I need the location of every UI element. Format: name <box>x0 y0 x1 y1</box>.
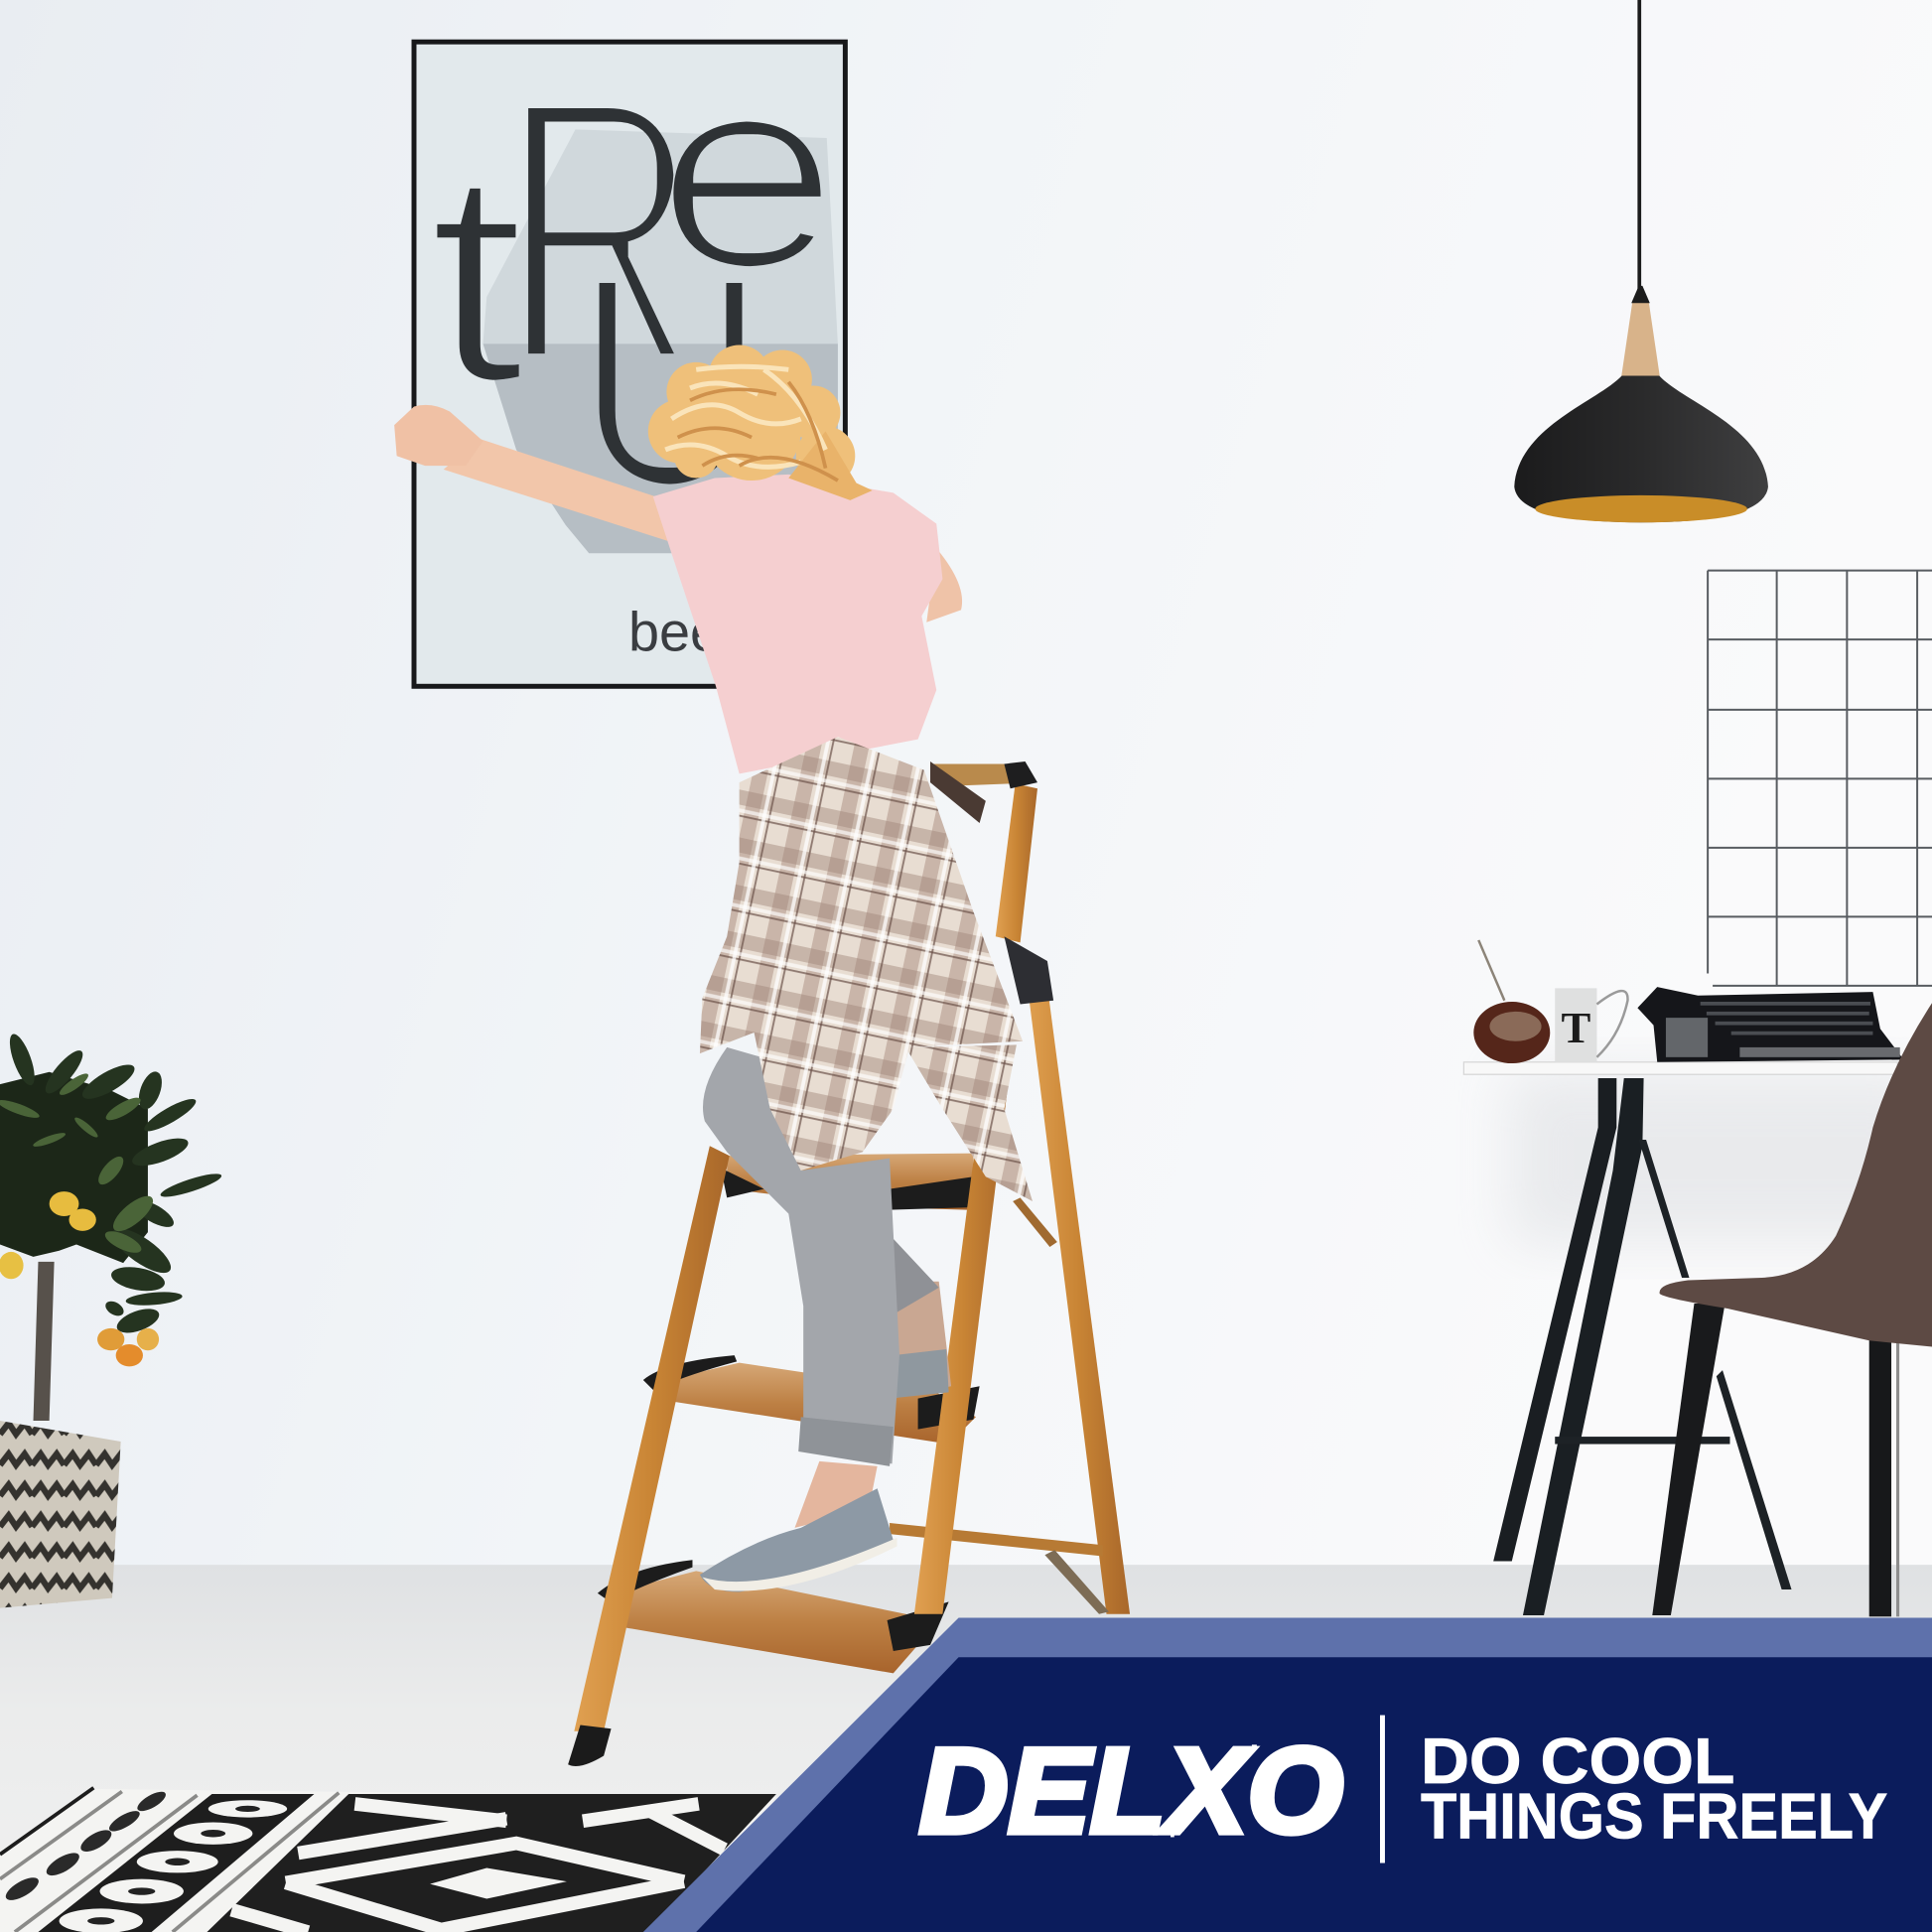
poster lettering: U <box>574 216 767 548</box>
woman <box>394 345 1053 1591</box>
step ladder <box>568 761 1130 1766</box>
rug oval band <box>38 1794 314 1932</box>
pendant lamp <box>1514 0 1768 522</box>
reaching arm and hand <box>444 439 671 542</box>
poster caption: bee <box>628 600 721 662</box>
floor <box>0 1565 1932 1932</box>
wire wall grid <box>1708 571 1932 986</box>
pink t-shirt <box>653 475 942 773</box>
poster lettering <box>426 19 842 548</box>
bottom step <box>604 1571 918 1673</box>
back rail <box>1026 967 1130 1614</box>
rubber foot <box>568 1725 612 1766</box>
rug main diamond field <box>207 1794 776 1932</box>
middle step <box>653 1363 976 1445</box>
poster lettering: R <box>501 19 698 442</box>
desk items: T <box>1561 1003 1590 1052</box>
jeans <box>703 1047 899 1463</box>
blonde hair <box>648 345 873 500</box>
plaid shirt tied at waist <box>700 737 1023 1171</box>
poster lettering: t <box>426 108 528 446</box>
rug <box>0 1788 776 1932</box>
divider <box>1380 1716 1385 1863</box>
back arm <box>926 548 962 622</box>
desk <box>1463 940 1932 1615</box>
dark outer leaves <box>5 1032 223 1337</box>
tagline <box>1421 1725 1887 1853</box>
tagline: DO COOL <box>1421 1725 1734 1797</box>
banner <box>643 1618 1932 1932</box>
top step <box>727 1154 973 1210</box>
ankle <box>794 1461 878 1528</box>
front right rail <box>914 1066 1011 1614</box>
tagline: THINGS FREELY <box>1421 1781 1887 1853</box>
chair <box>1652 1003 1932 1616</box>
rear foot and calf <box>894 1282 951 1399</box>
desk items <box>1473 940 1903 1063</box>
fruit <box>0 1191 159 1366</box>
poster lettering: e <box>653 19 842 325</box>
front left rail <box>574 1146 730 1731</box>
rug blob band <box>2 1788 169 1904</box>
lighter leaves <box>0 1070 158 1257</box>
upper post and handle <box>996 783 1037 942</box>
potted citrus plant <box>0 1032 223 1608</box>
shoe <box>700 1488 894 1591</box>
logo: DELXO: DELXO <box>919 1723 1343 1858</box>
wall poster <box>414 19 845 686</box>
